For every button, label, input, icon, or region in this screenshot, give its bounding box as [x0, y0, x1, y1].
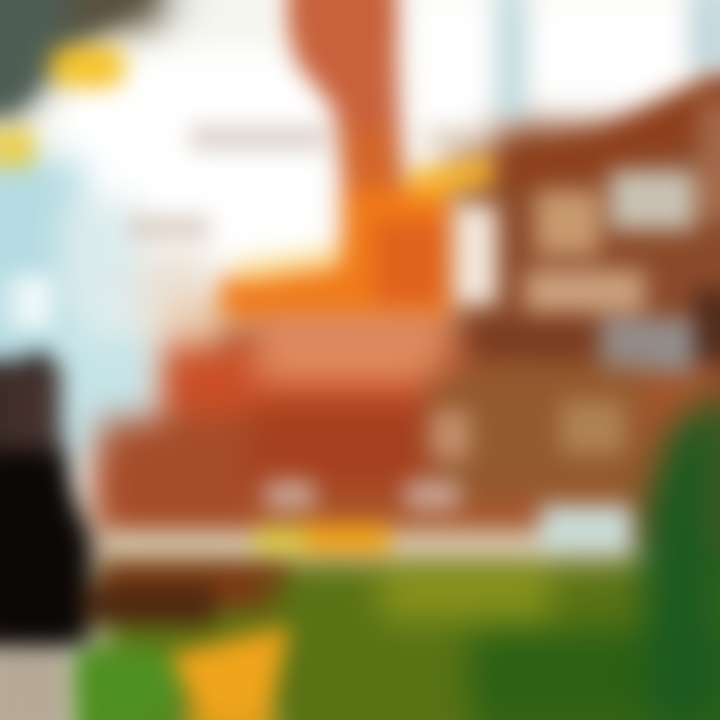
brown lower building	[100, 370, 645, 525]
orange mass	[215, 185, 452, 320]
yellow orange strip highlight	[255, 524, 390, 554]
faint heading smudge right	[425, 125, 490, 147]
lower building highlights	[265, 400, 625, 510]
dark brown under strip	[85, 560, 290, 625]
top left dark foliage	[0, 0, 200, 130]
central orange column	[288, 0, 405, 210]
warm lower underlayer	[100, 120, 720, 720]
sky glow	[60, 0, 690, 260]
left pale blue wall	[0, 160, 210, 455]
dark left silhouette	[0, 350, 92, 645]
left wall highlight	[12, 275, 52, 330]
warm glow line	[235, 155, 500, 282]
faint subheading smudge	[130, 215, 210, 239]
yellow highlights	[0, 46, 126, 168]
bottom left corner	[0, 648, 183, 720]
white strip	[105, 505, 632, 558]
building windows	[470, 100, 720, 373]
green foliage	[270, 565, 720, 720]
faint heading smudge	[190, 125, 325, 151]
top right pale column	[495, 0, 720, 120]
right dark green plant	[640, 390, 720, 720]
yellow orange foreground	[170, 625, 290, 720]
red orange terrace	[165, 300, 465, 420]
right building	[455, 70, 720, 370]
